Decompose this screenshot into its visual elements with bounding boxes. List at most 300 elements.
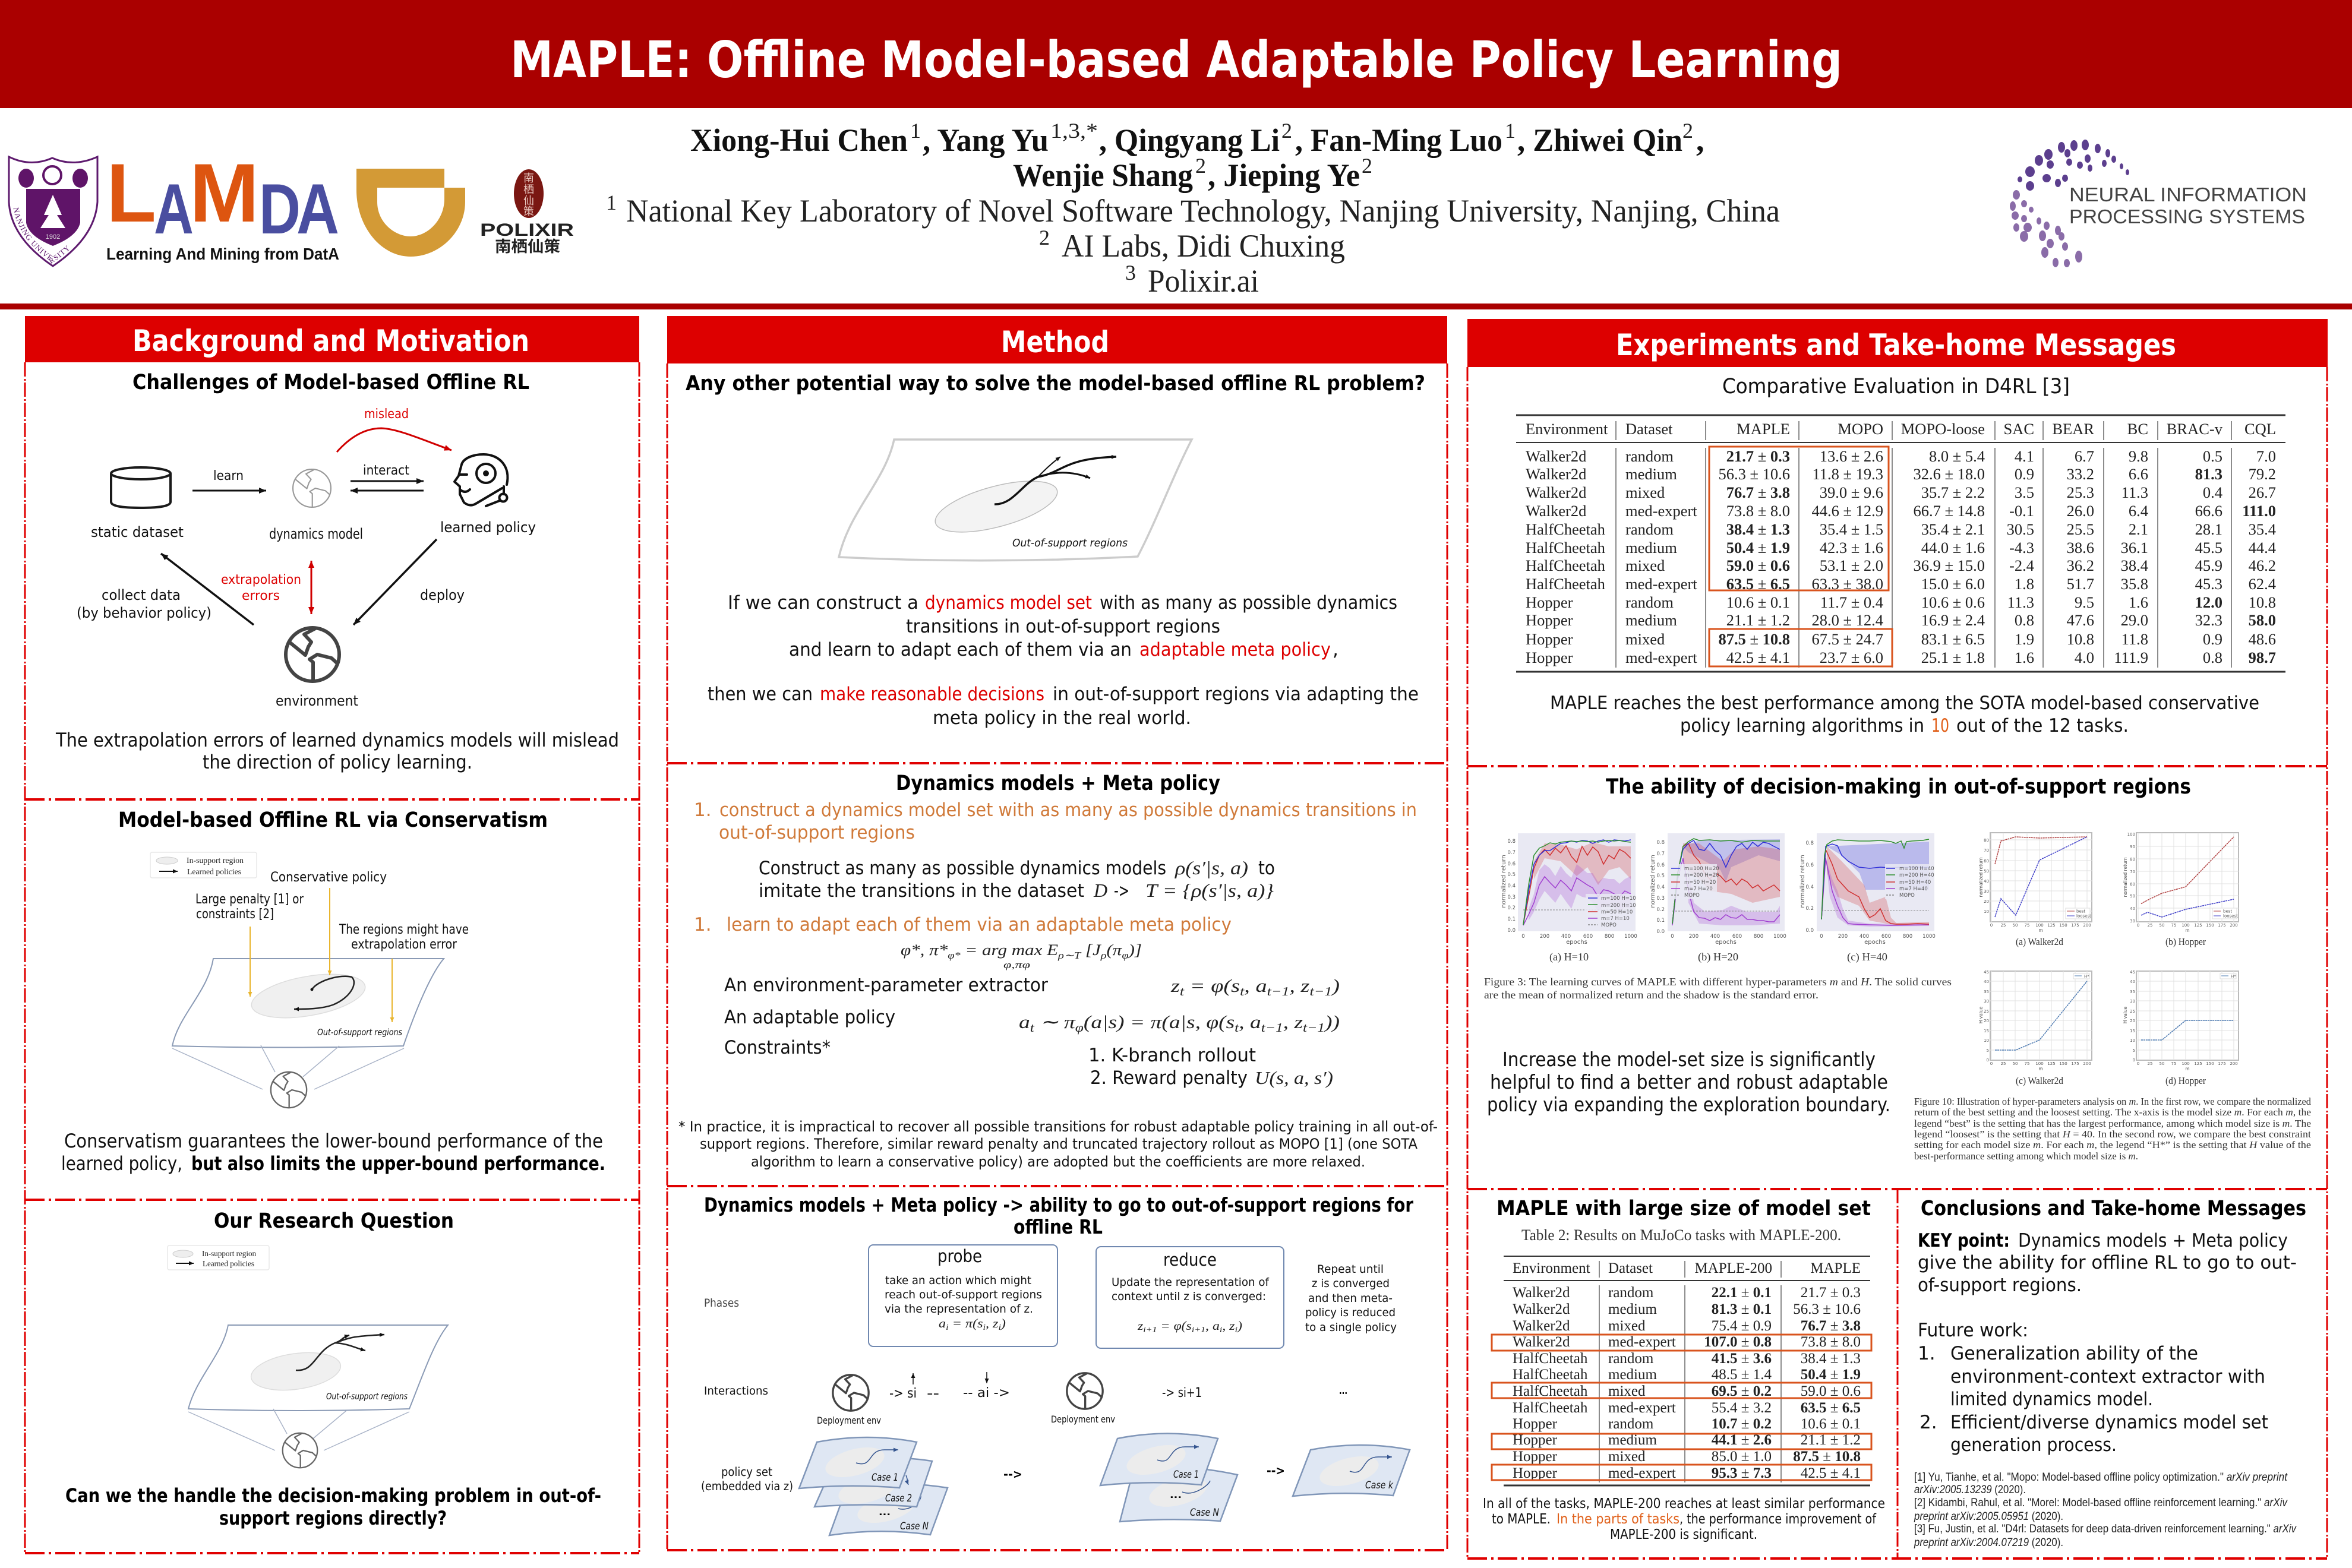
text: step two: φ [1075, 1020, 1084, 1035]
logo: Polixir: 仙 [523, 195, 534, 207]
chart: walker2d best vs loosest: 50 [1984, 869, 1989, 874]
chart: learning curves H=10: m=7 H=10 [1601, 916, 1630, 922]
chart: hopper best vs loosest: loosest [2223, 913, 2238, 918]
authors and affiliations: , Qingyang Li [1099, 122, 1280, 158]
table: D4RL results: 63.5 ± 6.5 [1726, 575, 1790, 593]
text: step one: to [1258, 858, 1275, 879]
table: D4RL results: 32.3 [2195, 611, 2222, 629]
caption: figure 10 [1914, 1096, 2312, 1162]
chart: hopper best vs loosest: 125 [2194, 923, 2202, 928]
text: conservatism statement: Conservatism guarantees the lower-bound performance of the [64, 1130, 603, 1152]
table: D4RL results: 79.2 [2249, 465, 2276, 483]
caption: figure 10: setting for each model size m. For each m, the legend “H*” is the setting that H value of the [1914, 1139, 2311, 1150]
legend: in-support region 2: Learned policies [203, 1260, 254, 1269]
chart: walker2d H value: 45 [1984, 970, 1989, 975]
table: D4RL results: Walker2d [1526, 483, 1586, 501]
text: step two: Constraints* [724, 1037, 831, 1058]
label: phases: Phases [704, 1297, 739, 1310]
box: reduce: i+1 [1192, 1326, 1205, 1335]
text: D4RL takeaway: 10 [1931, 715, 1949, 736]
logo: LAMDA: A [154, 169, 194, 249]
authors and affiliations [606, 119, 1780, 299]
box: probe: probe [937, 1246, 982, 1266]
chart: hopper best vs loosest: 50 [2160, 923, 2164, 928]
sheet stack: case 2 [814, 1458, 932, 1509]
table: MAPLE-200 results: 42.5 ± 4.1 [1801, 1465, 1861, 1481]
table: D4RL results: CQL [2244, 420, 2276, 438]
chart: learning curves H=10: 0.1 [1507, 916, 1516, 922]
chart: learning curves H=40: 0.4 [1805, 884, 1814, 890]
sheet stack: case 2: Case 2 [885, 1493, 912, 1504]
logo: Polixir: POLIXIR [480, 220, 574, 240]
table: MAPLE-200 results: Hopper [1513, 1416, 1558, 1432]
table: MAPLE-200 results: med-expert [1608, 1465, 1676, 1481]
table: MAPLE-200 results: Environment [1513, 1260, 1590, 1276]
chart: learning curves H=10: epochs [1566, 939, 1587, 946]
text: conservatism statement: learned policy, [61, 1152, 182, 1175]
table: MAPLE-200 results: 41.5 ± 3.6 [1712, 1351, 1772, 1367]
box: reduce: ) [1237, 1319, 1242, 1333]
table: D4RL results: 39.0 ± 9.6 [1820, 483, 1883, 501]
chart: learning curves H=40: MOPO [1899, 893, 1915, 899]
chart: learning curves H=10: 0.0 [1507, 928, 1516, 934]
box: reduce: i [1235, 1326, 1237, 1335]
chart: hopper H value: 20 [2130, 1019, 2135, 1023]
text: future work: Efficient/diverse dynamics model set [1950, 1412, 2268, 1433]
text: D4RL takeaway: out of the 12 tasks. [1956, 715, 2129, 736]
table: D4RL results: MOPO [1838, 420, 1883, 438]
formula: objective [901, 941, 1142, 970]
chart: walker2d H value: 15 [1984, 1029, 1989, 1033]
chart: walker2d H value: 125 [2047, 1061, 2056, 1066]
chart: hopper H value: 0 [2137, 1061, 2139, 1066]
panel: background and motivation [25, 316, 639, 1553]
authors and affiliations: , Fan-Ming Luo [1295, 122, 1502, 158]
chart: learning curves H=10: 0.7 [1507, 850, 1516, 856]
table: D4RL results: 10.8 [2249, 593, 2276, 611]
chart: hopper best vs loosest: (b) Hopper [2165, 936, 2206, 947]
table: MAPLE-200 results: 21.7 ± 0.3 [1801, 1285, 1861, 1301]
chart: learning curves H=20: MOPO [1684, 893, 1700, 899]
table: D4RL results: 23.7 ± 6.0 [1820, 649, 1883, 666]
chart: learning curves H=20: 0 [1671, 934, 1674, 940]
table: D4RL results: 35.4 ± 1.5 [1820, 520, 1883, 538]
heading: experiments: Experiments and Take-home Messages [1616, 328, 2176, 362]
authors and affiliations: AI Labs, Didi Chuxing [1062, 228, 1345, 264]
diagram: conservative policy plane: Conservative policy [270, 870, 387, 885]
table: D4RL results: 50.4 ± 1.9 [1726, 539, 1790, 557]
chart: walker2d H value: 50 [2013, 1061, 2018, 1066]
chart: hopper H value: 35 [2130, 990, 2135, 994]
table: D4RL results: medium [1625, 611, 1677, 629]
chart: hopper best vs loosest: best [2223, 909, 2232, 913]
chart: walker2d H value: 5 [1987, 1048, 1989, 1053]
chart: learning curves H=20: 600 [1732, 934, 1742, 940]
box: probe: , z [986, 1316, 998, 1330]
chart: learning curves H=10: m=100 H=10 [1601, 896, 1636, 902]
text: step two: U(s, a, s′) [1255, 1067, 1333, 1088]
text: research question [65, 1484, 601, 1529]
chart: walker2d H value: 150 [2059, 1061, 2067, 1066]
sheet pair: case N: Case N [1190, 1507, 1219, 1519]
table: MAPLE-200 results: Hopper [1513, 1449, 1558, 1465]
text: step one: T = {ρ(s′|s, a)} [1145, 880, 1274, 901]
table: MAPLE-200 results: 10.7 ± 0.2 [1712, 1416, 1772, 1432]
table: D4RL results: med-expert [1625, 502, 1697, 520]
table: MAPLE-200 results: med-expert [1608, 1334, 1676, 1350]
formula: objective: φ*, π* [901, 941, 940, 959]
text: MAPLE-200 statement [1483, 1496, 1885, 1542]
header separator band [0, 304, 2352, 309]
table: MAPLE-200 results: 95.3 ± 7.3 [1712, 1465, 1772, 1481]
box: reduce: Update the representation of [1112, 1276, 1270, 1289]
chart: learning curves H=20: 0.1 [1656, 918, 1665, 924]
text: references: arXiv:2005.13239 (2020). [1914, 1484, 2026, 1496]
logo: LAMDA: D [259, 169, 301, 249]
chart: walker2d best vs loosest: 100 [2035, 923, 2044, 928]
table: D4RL results: 28.1 [2195, 520, 2222, 538]
table: D4RL results: med-expert [1625, 575, 1697, 593]
arrow: learn [192, 489, 266, 492]
table: MAPLE-200 results: 56.3 ± 10.6 [1793, 1301, 1861, 1317]
table: D4RL results: 38.4 [2121, 557, 2148, 574]
text: method idea: , [1333, 639, 1338, 660]
table: D4RL results: 35.7 ± 2.2 [1921, 483, 1985, 501]
text: method idea: dynamics model set [925, 592, 1092, 614]
text: step two: , z [1289, 975, 1309, 996]
highlight boxes: significant rows [1492, 1335, 1871, 1480]
table: MAPLE-200 results: mixed [1608, 1449, 1646, 1465]
text: step two: ) [1331, 975, 1340, 996]
text: key point [1918, 1230, 2297, 1296]
text: footnote [678, 1118, 1438, 1170]
box: probe [869, 1245, 1057, 1346]
subheading: ability [704, 1193, 1414, 1238]
panel: experiments and take-home messages [1467, 319, 2328, 1558]
text: step two: t−1 [1303, 1020, 1325, 1035]
authors and affiliations: , Yang Yu [923, 122, 1049, 158]
chart: learning curves H=40: 200 [1838, 934, 1848, 940]
table: D4RL results: 35.4 ± 2.1 [1921, 520, 1985, 538]
authors and affiliations: National Key Laboratory of Novel Software Technology, Nanjing University, Nanjing, China [626, 193, 1780, 229]
caption: figure 10: legend “best” is the setting that has the largest performance, among which model size is m. The [1914, 1118, 2311, 1129]
chart: hopper best vs loosest: normalized return [2123, 857, 2128, 897]
table: D4RL results: 7.0 [2256, 447, 2276, 465]
table: D4RL results: 11.8 ± 19.3 [1812, 465, 1883, 483]
table: MAPLE-200 results: HalfCheetah [1513, 1367, 1588, 1383]
text: key point: of-support regions. [1918, 1275, 2082, 1296]
chart: walker2d H value: 30 [1984, 999, 1989, 1004]
diagram: conservative policy plane: constraints [2] [196, 907, 274, 922]
table: D4RL results: 11.3 [2007, 593, 2034, 611]
chart: walker2d best vs loosest: 60 [1984, 859, 1989, 864]
text: future work: environment-context extractor with [1950, 1366, 2265, 1387]
chart: learning curves H=10: m=50 H=10 [1601, 909, 1633, 915]
chart: walker2d best vs loosest: (a) Walker2d [2016, 936, 2063, 947]
text: step two: t−1 [1309, 984, 1332, 998]
chart: walker2d best vs loosest: normalized return [1978, 857, 1984, 897]
chart: learning curves H=20: 0.5 [1656, 873, 1665, 879]
chart: learning curves H=40: m=200 H=40 [1899, 872, 1934, 878]
table: MAPLE-200 results: 55.4 ± 3.2 [1712, 1400, 1772, 1416]
table: D4RL results: 44.6 ± 12.9 [1811, 502, 1883, 520]
subheading: decision-making ability: The ability of decision-making in out-of-support regions [1606, 775, 2191, 799]
caption: figure 10: Figure 10: Illustration of hyper-parameters analysis on m. In the first row, we compare the normalized [1914, 1096, 2312, 1107]
table: D4RL results: 25.5 [2067, 520, 2094, 538]
row: interactions: Deployment env [817, 1415, 881, 1426]
text: repeat until: policy is reduced [1305, 1306, 1396, 1319]
table: D4RL results: BRAC-v [2167, 420, 2223, 438]
table: D4RL results: 2.1 [2129, 520, 2148, 538]
chart: learning curves H=10: 200 [1540, 934, 1549, 940]
chart: learning curves H=40 [1799, 833, 1936, 963]
text: step one: Construct as many as possible dynamics models [759, 858, 1166, 879]
row: interactions: -> si [889, 1386, 917, 1401]
diagram: conservative policy plane: Large penalty [1] or [195, 892, 304, 907]
table: D4RL results: BC [2127, 420, 2148, 438]
row: interactions: -- ai -> [963, 1386, 1010, 1401]
formula: objective: (π [1106, 941, 1123, 959]
text: step two: (a|s) = π(a|s, φ(s [1084, 1011, 1235, 1032]
authors and affiliations: 1 [1505, 119, 1516, 143]
table: D4RL results: mixed [1625, 557, 1665, 574]
chart: walker2d best vs loosest: 200 [2083, 923, 2091, 928]
chart: walker2d best vs loosest: 40 [1984, 879, 1989, 884]
box: probe: i [983, 1323, 986, 1332]
chart: hopper best vs loosest: 90 [2130, 845, 2135, 849]
text: research question: Can we the handle the decision-making problem in out-of- [65, 1484, 601, 1507]
table: MAPLE-200 results: Walker2d [1513, 1334, 1570, 1350]
title: MAPLE: Offline Model-based Adaptable Policy Learning [510, 31, 1842, 90]
chart: walker2d best vs loosest: 125 [2047, 923, 2056, 928]
table: D4RL results: 111.0 [2242, 502, 2276, 520]
table: D4RL results: 0.8 [2203, 649, 2222, 666]
text: references: [1] Yu, Tianhe, et al. "Mopo: Model-based offline policy optimization." arXiv preprint [1914, 1471, 2288, 1484]
formula: objective: φ* [948, 950, 961, 961]
table: D4RL results: mixed [1625, 630, 1665, 648]
table: D4RL results: Hopper [1526, 630, 1573, 648]
chart: hopper best vs loosest: 50 [2130, 894, 2135, 899]
label: extrapolation errors [221, 573, 301, 603]
chart: walker2d best vs loosest: 150 [2059, 923, 2067, 928]
text: MAPLE-200 statement: , the performance improvement of [1679, 1512, 1877, 1527]
arrow: mislead [337, 428, 452, 452]
chart: hopper best vs loosest: m [2185, 928, 2190, 933]
chart: walker2d H value: 25 [1984, 1009, 1989, 1014]
chart: walker2d best vs loosest: 70 [1984, 848, 1989, 853]
icon: static dataset cylinder [111, 467, 171, 508]
text: future work: generation process. [1950, 1434, 2117, 1456]
table: MAPLE-200 results: mixed [1608, 1383, 1646, 1399]
chart: hopper H value: H value [2123, 1006, 2128, 1023]
table: D4RL results: 9.8 [2129, 447, 2148, 465]
text: extrapolation errors statement: the direction of policy learning. [203, 751, 472, 773]
authors and affiliations: 2 [1281, 119, 1292, 143]
table: D4RL results: 66.7 ± 14.8 [1913, 502, 1985, 520]
text: future work: limited dynamics model. [1950, 1389, 2153, 1410]
table: D4RL results: 42.3 ± 1.6 [1820, 539, 1883, 557]
chart: hopper best vs loosest: 175 [2218, 923, 2226, 928]
chart: walker2d H value: 175 [2071, 1061, 2079, 1066]
label: learned policy: learned policy [440, 519, 536, 536]
chart: learning curves H=20: epochs [1715, 939, 1737, 946]
text: step two: )) [1324, 1011, 1340, 1032]
chart: hopper best vs loosest [2123, 832, 2239, 947]
box: reduce: reduce [1163, 1250, 1217, 1270]
table: MAPLE-200 results: Walker2d [1513, 1301, 1570, 1317]
chart: hopper H value: 50 [2160, 1061, 2164, 1066]
table: MAPLE-200 results: 59.0 ± 0.6 [1801, 1383, 1861, 1399]
row: policy set sheets: --> [1267, 1463, 1285, 1478]
authors and affiliations: 2 [1682, 119, 1693, 143]
arrows: interact [351, 481, 424, 491]
arrow: deploy [353, 539, 437, 625]
sheet stack: case 1 [799, 1437, 917, 1488]
text: step two: t [1180, 984, 1185, 998]
row: interactions: ... [1339, 1385, 1347, 1396]
table: D4RL results: 1.8 [2015, 575, 2034, 593]
table: D4RL results: medium [1625, 539, 1677, 557]
text: method idea: meta policy in the real world. [933, 707, 1191, 729]
text: repeat until: and then meta- [1308, 1292, 1393, 1305]
table: D4RL results: 38.4 ± 1.3 [1726, 520, 1790, 538]
table: D4RL results: 6.6 [2129, 465, 2148, 483]
text: method idea: with as many as possible dynamics [1100, 592, 1397, 614]
chart: learning curves H=10: 600 [1583, 934, 1593, 940]
table: D4RL results: 26.7 [2249, 483, 2276, 501]
table: MAPLE-200 results: mixed [1608, 1318, 1646, 1334]
table: D4RL results: 13.6 ± 2.6 [1820, 447, 1883, 465]
table: D4RL results: MOPO-loose [1901, 420, 1985, 438]
chart: learning curves H=40: 0.0 [1805, 928, 1814, 934]
table: MAPLE-200 results: Hopper [1513, 1465, 1558, 1481]
chart: walker2d H value: 40 [1984, 979, 1989, 984]
diagram: research question plane: Out-of-support regions [326, 1391, 408, 1402]
table: D4RL results: 26.0 [2067, 502, 2094, 520]
chart: learning curves H=20: 0.2 [1656, 907, 1665, 913]
table: D4RL results: 9.5 [2075, 593, 2094, 611]
table: D4RL results: 51.7 [2067, 575, 2094, 593]
table: D4RL results: 35.8 [2121, 575, 2148, 593]
chart: hopper H value: m [2185, 1066, 2190, 1071]
table: MAPLE-200 results: 69.5 ± 0.2 [1712, 1383, 1772, 1399]
chart: walker2d H value: 200 [2083, 1061, 2091, 1066]
text: repeat until: Repeat until [1317, 1263, 1384, 1276]
table: MAPLE-200 results: medium [1608, 1432, 1657, 1448]
subheading: question: Any other potential way to solve the model-based offline RL problem? [686, 372, 1425, 396]
caption: table 2: Table 2: Results on MuJoCo tasks with MAPLE-200. [1521, 1226, 1841, 1244]
chart: learning curves H=20: 0.0 [1656, 929, 1665, 935]
chart: learning curves H=10: 0.5 [1507, 872, 1516, 878]
text: model-set size statement: Increase the model-set size is significantly [1502, 1048, 1876, 1071]
formula: objective: φ,πφ [1003, 959, 1030, 970]
table: D4RL results: 44.0 ± 1.6 [1921, 539, 1985, 557]
table: D4RL results: 48.6 [2249, 630, 2276, 648]
table: D4RL results: 36.9 ± 15.0 [1913, 557, 1985, 574]
chart: walker2d best vs loosest: 50 [2013, 923, 2018, 928]
table: MAPLE-200 results: med-expert [1608, 1400, 1676, 1416]
text: step one: D [1093, 880, 1107, 901]
chart: learning curves H=10: 0 [1521, 934, 1525, 940]
chart: walker2d best vs loosest: 20 [1984, 899, 1989, 904]
logo: Didi [356, 169, 465, 257]
table: D4RL results: Walker2d [1526, 447, 1586, 465]
subheading: research question: Our Research Question [214, 1209, 454, 1233]
text: footnote: algorithm to learn a conservative policy) are adopted but the coefficients are more relaxed. [751, 1153, 1365, 1170]
chart: hopper H value: 25 [2148, 1061, 2152, 1066]
chart: learning curves H=20: 800 [1754, 934, 1763, 940]
row: interactions [704, 1372, 1347, 1426]
chart: walker2d H value: 10 [1984, 1038, 1989, 1043]
text: step two: 2. Reward penalty [1090, 1067, 1248, 1089]
table: D4RL results: 10.8 [2067, 630, 2094, 648]
chart: hopper best vs loosest: 100 [2181, 923, 2190, 928]
table: MAPLE-200 results: medium [1608, 1301, 1657, 1317]
text: method idea [708, 592, 1419, 729]
subheading: ability: Dynamics models + Meta policy -> ability to go to out-of-support regions for [704, 1193, 1414, 1216]
chart: walker2d H value: 20 [1984, 1019, 1989, 1023]
logo: Nanjing University shield: NANJING UNIVERSITY [13, 207, 69, 264]
legend: in-support region 2 [168, 1245, 269, 1270]
table: MAPLE-200 results: 87.5 ± 10.8 [1793, 1449, 1861, 1465]
box: probe: = π(s [949, 1316, 983, 1330]
text: references [1914, 1471, 2297, 1549]
chart: walker2d best vs loosest [1978, 833, 2092, 947]
table: D4RL results: 46.2 [2249, 557, 2276, 574]
chart: walker2d H value: 25 [2001, 1061, 2006, 1066]
diagram: offline RL loop [77, 407, 536, 709]
text: step two: = φ(s [1184, 975, 1240, 996]
icon: learned policy robot head [454, 454, 507, 506]
table: D4RL results: 66.6 [2195, 502, 2222, 520]
diagram: conservative policy plane: extrapolation error [351, 937, 457, 952]
table: D4RL results: random [1625, 520, 1674, 538]
sheet pair: case N: ... [1170, 1491, 1182, 1500]
label: mislead: mislead [364, 407, 409, 422]
chart: walker2d best vs loosest: 0 [1990, 923, 1993, 928]
chart: walker2d best vs loosest: 25 [2001, 923, 2006, 928]
label: static dataset: static dataset [91, 524, 184, 540]
text: step one [694, 799, 1417, 902]
table: D4RL results: 16.9 ± 2.4 [1921, 611, 1985, 629]
table: D4RL results: 56.3 ± 10.6 [1718, 465, 1790, 483]
box: reduce: i [1220, 1326, 1222, 1335]
table: D4RL results: HalfCheetah [1526, 557, 1605, 574]
chart: learning curves H=20: (b) H=20 [1698, 951, 1738, 963]
text: repeat until: to a single policy [1305, 1321, 1397, 1334]
icon: deployment env globe 2 [1067, 1373, 1103, 1409]
sheet pair: case N [1120, 1466, 1237, 1522]
table: MAPLE-200 results: 38.4 ± 1.3 [1801, 1351, 1861, 1367]
label: extrapolation errors: errors [242, 589, 280, 603]
logo: LAMDA: M [190, 146, 259, 239]
panel: method [667, 316, 1447, 1550]
chart: walker2d H value: m [2038, 1066, 2043, 1071]
table: D4RL results: 15.0 ± 6.0 [1921, 575, 1985, 593]
text: method idea: adaptable meta policy [1139, 639, 1331, 660]
chart: hopper H value: 150 [2206, 1061, 2214, 1066]
chart: learning curves H=40: 600 [1881, 934, 1891, 940]
box: reduce: context until z is converged: [1112, 1290, 1266, 1303]
sheet pair: case 1: Case 1 [1173, 1469, 1199, 1481]
text: step one: -> [1114, 880, 1129, 902]
table: D4RL results: 83.1 ± 6.5 [1921, 630, 1985, 648]
text: model-set size statement: policy via expanding the exploration boundary. [1487, 1093, 1890, 1116]
chart: learning curves H=40: 0.6 [1805, 862, 1814, 868]
table: D4RL results: 33.2 [2067, 465, 2094, 483]
table: D4RL results: -0.1 [2009, 502, 2034, 520]
text: step two: t−1 [1267, 984, 1289, 998]
